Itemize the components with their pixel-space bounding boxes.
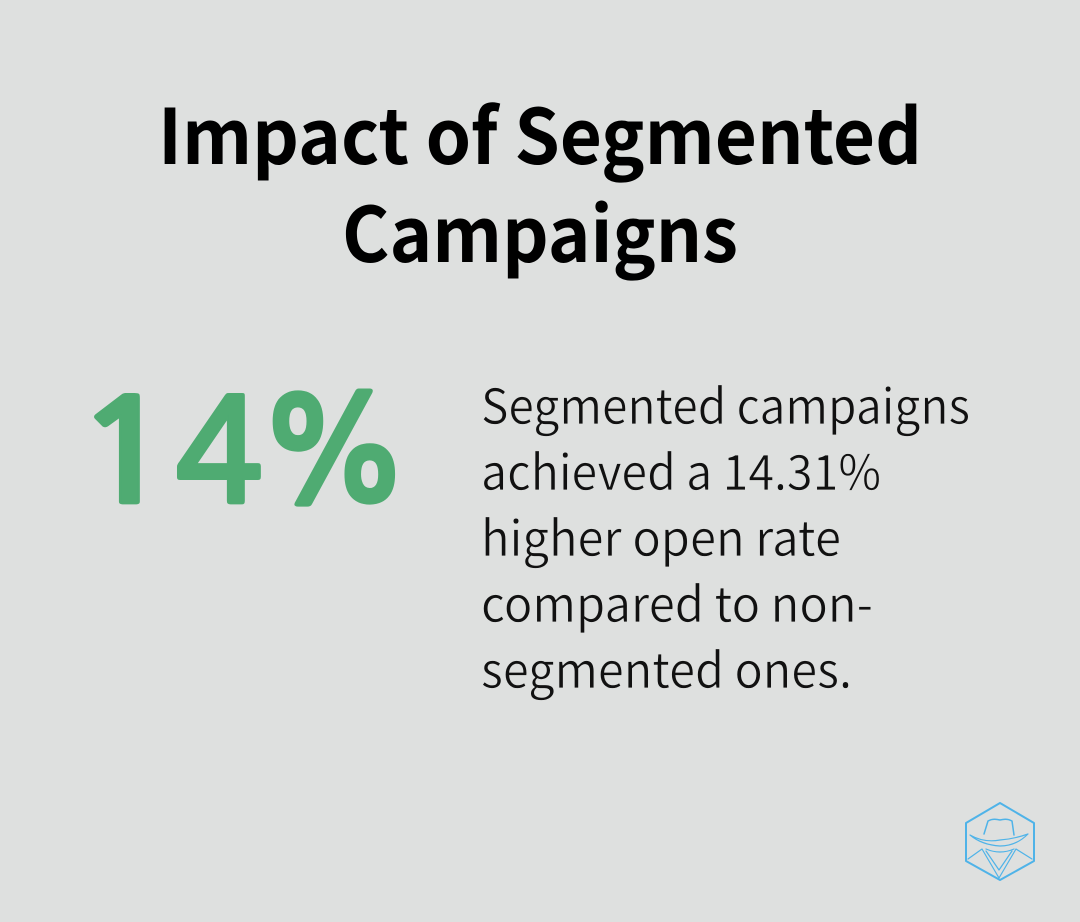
icon: hexagon logo with spy hat (966, 803, 1034, 880)
icon: hat brim (970, 834, 1028, 846)
description text: achieved a 14.31% (481, 434, 881, 505)
description text (481, 368, 970, 703)
big stat: 14% (73, 383, 410, 525)
description text: compared to non- (481, 566, 873, 637)
description text: higher open rate (481, 500, 841, 571)
icon: hat crown (984, 819, 1014, 835)
icon: collar (968, 849, 1032, 878)
big stat: 14%: % (258, 383, 410, 525)
title: Impact of Segmented (158, 76, 922, 186)
big stat: 14%: 1 (73, 383, 178, 525)
description text: Segmented campaigns (481, 368, 970, 439)
title: Campaigns (342, 174, 738, 284)
icon: hexagon outline (966, 803, 1034, 880)
title (158, 76, 922, 284)
description text: segmented ones. (481, 632, 852, 703)
big stat: 14%: 4 (174, 383, 264, 525)
